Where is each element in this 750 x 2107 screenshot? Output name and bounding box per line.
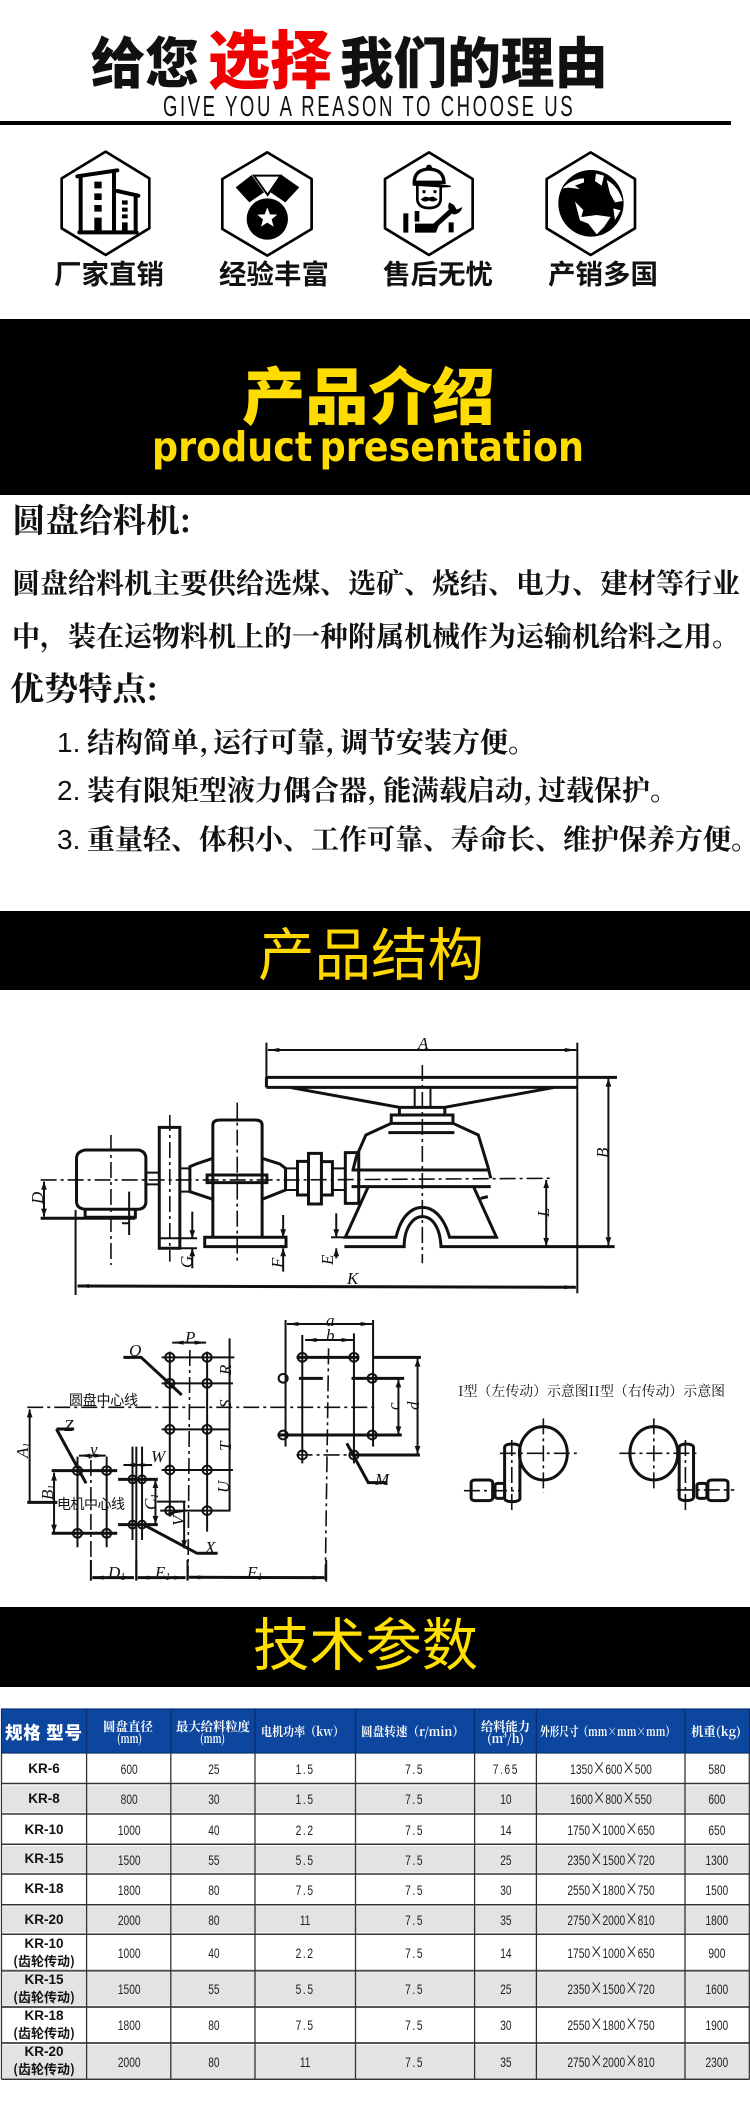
diagram: side elevation of feeder: F [268,1257,287,1269]
feature labels: 厂家直销 [54,253,164,292]
row values: 11 [300,2054,311,2070]
row values: 25 [500,1852,512,1868]
table grid [2,1709,750,2079]
row values: 11 [300,1912,311,1928]
row values: 2550×1800×750 [567,1877,655,1901]
model column: KR-20 [24,1912,64,1927]
row values: 1900 [705,2017,728,2033]
diagram: foundation bolt layout: X [204,1538,216,1557]
diagram: foundation bolt layout: d [404,1401,423,1410]
advantages list: 过载保护。 [538,769,678,809]
diagram: foundation bolt layout: y [88,1440,98,1459]
diagram: foundation bolt layout: 1 [165,1572,170,1583]
banner: technical parameters [0,1600,750,1687]
table header: (m³/h) [487,1729,524,1747]
model column [13,1761,75,2078]
diagram: foundation bolt layout [13,1311,423,1583]
row values: 1500 [118,1852,141,1868]
row values: 2350×1500×720 [567,1847,655,1871]
model column: KR-15 [24,1851,64,1866]
row values: 7.5 [405,1852,424,1868]
model column: KR-18 [24,1881,64,1896]
advantages list: 重量轻、体积小、工作可靠、寿命长、维护保养方便。 [87,818,750,858]
table header: 圆盘转速（r/min） [361,1722,464,1740]
advantages list: 能满载启动, [383,769,532,809]
diagram: foundation bolt layout: A [13,1448,32,1458]
row values: 2550×1800×750 [567,2012,655,2036]
diagram: foundation bolt layout: P [184,1328,195,1347]
row values: 7.5 [405,2054,424,2070]
diagram: foundation bolt layout: a [326,1311,334,1330]
alternating row shading [3,1786,748,2078]
row values: 2350×1500×720 [567,1976,655,2000]
row values: 2.2 [296,1822,315,1838]
diagram: side elevation of feeder [28,1034,617,1295]
row values: 55 [208,1981,220,1997]
row values: 600 [708,1791,726,1807]
table header: 规格 型号 [5,1720,82,1745]
advantages list: 装有限矩型液力偶合器, [87,769,376,809]
diagram: foundation bolt layout: D [108,1563,120,1582]
row values: 7.5 [405,1912,424,1928]
advantages list: 调节安装方便。 [340,721,536,761]
diagram: left and right drive schematics [458,1381,734,1510]
row values: 2300 [705,2054,728,2070]
advantages list [57,721,750,858]
banner: technical parameters: 技术参数 [253,1600,478,1682]
icon: service engineer [385,152,473,255]
row values: 80 [208,2054,220,2070]
diagram: foundation bolt layout: E [155,1563,165,1582]
row values: 35 [500,2054,512,2070]
row values: 1600 [705,1981,728,1997]
diagram: foundation bolt layout: b [326,1326,334,1345]
model column: (齿轮传动) [13,1987,75,2006]
model column: KR-20 [24,2044,64,2059]
row values: 900 [708,1945,726,1961]
row values: 7.5 [296,2017,315,2033]
row values: 1.5 [296,1761,315,1777]
row values: 1500 [705,1882,728,1898]
row values: 80 [208,1912,220,1928]
table header: 最大给料粒度 [176,1717,250,1735]
diagram: foundation bolt layout: 电机中心线 [57,1494,125,1514]
diagram: side elevation of feeder: A [417,1034,429,1053]
banner: product presentation: product presentation [152,423,584,471]
row values: 1500 [118,1981,141,1997]
row values: 2750×2000×810 [567,1907,655,1931]
model column: KR-10 [24,1822,64,1837]
banner: product structure [0,910,750,992]
feature labels [54,253,658,292]
diagram: foundation bolt layout: Z [64,1416,74,1435]
diagram: foundation bolt layout: 1 [120,1572,125,1583]
diagram: side elevation of feeder: B [593,1147,612,1158]
table header: 圆盘直径 [103,1717,153,1735]
subtitle: GIVE YOU A REASON TO CHOOSE US [163,91,573,123]
diagram: foundation bolt layout: V [169,1513,188,1526]
advantages list: 运行可靠, [213,721,334,761]
diagram: side elevation of feeder: G [177,1256,196,1268]
diagram: foundation bolt layout: 1 [47,1485,58,1490]
diagram: side elevation of feeder: D [28,1191,47,1205]
diagram: foundation bolt layout: C [141,1499,160,1510]
table header: 外形尺寸（mm×mm×mm） [540,1722,675,1740]
diagram: foundation bolt layout: U [214,1479,233,1493]
model column: (齿轮传动) [13,2059,75,2078]
row values: 7.5 [405,1882,424,1898]
advantages list: 2. [57,775,80,806]
diagram: foundation bolt layout: 圆盘中心线 [69,1390,138,1410]
heading: disc feeder: 圆盘给料机: [12,495,191,542]
row values: 1800 [118,1882,141,1898]
row values: 7.5 [405,1761,424,1777]
title: reasons to choose us: 我们的理由 [340,19,608,99]
diagram: foundation bolt layout: F [247,1563,257,1582]
row values: 5.5 [296,1852,315,1868]
diagram: left and right drive schematics: I型（左传动）示意图II型（右传动）示意图 [458,1381,725,1401]
model column: KR-6 [28,1761,60,1776]
table header: 机重(kg) [691,1722,741,1740]
diagram: side elevation of feeder: L [534,1208,553,1218]
row values: 1800 [705,1912,728,1928]
row values: 1000 [118,1945,141,1961]
model column: KR-10 [24,1936,64,1951]
title: reasons to choose us [91,11,608,102]
feature labels: 经验丰富 [219,253,329,292]
row values: 1000 [118,1822,141,1838]
row values: 650 [708,1822,726,1838]
diagram: foundation bolt layout: 1 [257,1572,262,1583]
row values: 40 [208,1822,220,1838]
row values: 2000 [118,2054,141,2070]
heading: advantages: 优势特点: [10,664,158,710]
diagram: foundation bolt layout: Q [129,1341,141,1360]
diagram: side elevation of feeder: E [318,1254,337,1266]
diagram: foundation bolt layout: 1 [22,1443,33,1448]
banner: product presentation: 产品介绍 [242,347,495,437]
row values: 7.5 [405,1981,424,1997]
row values: 1750×1000×650 [567,1817,655,1841]
row values: 80 [208,2017,220,2033]
model column: KR-18 [24,2008,64,2023]
row values: 7.5 [405,1945,424,1961]
row values: 14 [500,1822,512,1838]
intro paragraph [12,562,740,655]
row values: 7.5 [405,1822,424,1838]
icon: factory [62,152,149,255]
intro paragraph: 圆盘给料机主要供给选煤、选矿、烧结、电力、建材等行业 [12,562,740,602]
row values: 1750×1000×650 [567,1940,655,1964]
model column: (齿轮传动) [13,1951,75,1970]
diagram: foundation bolt layout: S [216,1399,235,1408]
row values: 80 [208,1882,220,1898]
row values: 25 [500,1981,512,1997]
row values: 7.65 [493,1761,519,1777]
model column: (齿轮传动) [13,2023,75,2042]
row values: 1600×800×550 [570,1786,652,1810]
diagram: foundation bolt layout: W [151,1447,167,1466]
diagram: foundation bolt layout: T [216,1440,235,1451]
row values: 55 [208,1852,220,1868]
banner: product presentation [0,319,750,495]
title: reasons to choose us: 给您 [91,19,199,99]
title: reasons to choose us: 选择 [208,11,332,102]
row values: 14 [500,1945,512,1961]
feature labels: 售后无忧 [383,253,493,292]
diagram: foundation bolt layout: 1 [150,1494,161,1499]
row values: 35 [500,1912,512,1928]
row values: 7.5 [405,1791,424,1807]
row values: 30 [208,1791,220,1807]
diagram: foundation bolt layout: B [38,1490,57,1500]
row values: 2750×2000×810 [567,2049,655,2073]
feature labels: 产销多国 [548,253,658,292]
advantages list: 3. [57,824,80,855]
header rule [0,121,731,125]
diagram: foundation bolt layout: M [374,1470,390,1489]
row values: 7.5 [296,1882,315,1898]
model column: KR-8 [28,1791,60,1806]
diagram: side elevation of feeder: K [346,1269,360,1288]
row values: 25 [208,1761,220,1777]
table header: 给料能力 [481,1717,530,1735]
row values [118,1756,728,2073]
table header: (mm) [117,1729,142,1747]
icon: medal [222,152,312,256]
row values: 1300 [705,1852,728,1868]
table header: 电机功率（kw） [261,1722,344,1740]
advantages list: 1. [57,727,80,758]
table: technical parameters [2,1709,750,2079]
diagram: foundation bolt layout: R [216,1364,235,1376]
table header: (mm) [200,1729,225,1747]
table header [2,1709,750,1753]
row values: 30 [500,2017,512,2033]
row values: 2000 [118,1912,141,1928]
row values: 40 [208,1945,220,1961]
row values: 5.5 [296,1981,315,1997]
banner: product structure: 产品结构 [258,910,484,992]
row values: 30 [500,1882,512,1898]
row values: 1350×600×500 [570,1756,652,1780]
row values: 580 [708,1761,726,1777]
row values: 600 [121,1761,138,1777]
intro paragraph: 中，装在运物料机上的一种附属机械作为运输机给料之用。 [12,615,740,655]
diagram: foundation bolt layout: c [384,1402,403,1410]
icon: globe [547,152,635,255]
advantages list: 结构简单, [87,721,208,761]
row values: 800 [121,1791,138,1807]
model column: KR-15 [24,1972,64,1987]
row values: 1800 [118,2017,141,2033]
row values: 1.5 [296,1791,315,1807]
row values: 10 [500,1791,512,1807]
row values: 7.5 [405,2017,424,2033]
row values: 2.2 [296,1945,315,1961]
